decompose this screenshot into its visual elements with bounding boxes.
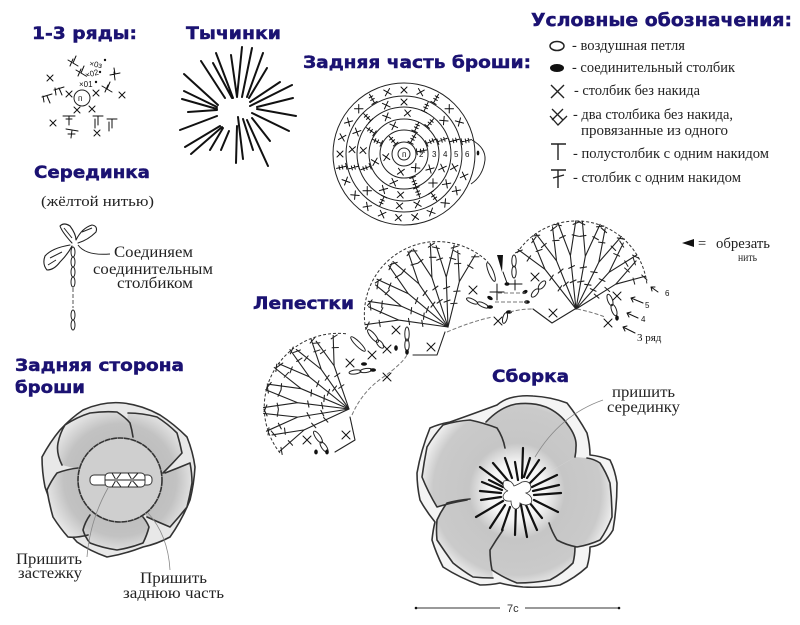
illustration: back side of brooch xyxy=(42,403,195,570)
legend item: slip stitch: - соединительный столбик xyxy=(572,60,736,76)
legend: cut thread marker xyxy=(682,236,770,264)
chart: petal 1 xyxy=(263,333,407,455)
label: join with slip stitch: столбиком xyxy=(117,275,193,292)
label: sew on back part xyxy=(123,570,224,602)
heading: stamens: Тычинки xyxy=(186,24,281,44)
chart: crochet rows 1-3: ×02 xyxy=(84,68,100,80)
label: sew on centre: серединку xyxy=(607,399,680,416)
sewn-on disc xyxy=(78,438,162,522)
heading: back side of brooch xyxy=(15,356,184,398)
legend item: two single crochets from one: провязанные из одного xyxy=(581,123,728,139)
chart: round back part of brooch: 2 xyxy=(419,150,424,159)
legend item: chain stitch: - воздушная петля xyxy=(572,38,685,54)
heading: back side of brooch: броши xyxy=(15,378,85,398)
label: join with slip stitch xyxy=(93,244,213,292)
heading: petals: Лепестки xyxy=(253,294,354,314)
label: sew on clasp xyxy=(16,551,82,582)
label: sew on clasp: застежку xyxy=(18,565,82,582)
front petals shading xyxy=(422,403,612,583)
back petal layer xyxy=(417,396,617,587)
chart: round back part of brooch: 5 xyxy=(454,150,459,159)
labels: row numbers with arrows: 4 xyxy=(641,315,646,324)
chart: petal 2 xyxy=(364,242,533,355)
label: join with slip stitch: соединительным xyxy=(93,261,213,278)
legend: cut thread marker: обрезать xyxy=(716,236,770,252)
dimension: 7 cm: 7с xyxy=(507,603,519,615)
heading: centre: Серединка xyxy=(34,163,150,183)
petal outlines xyxy=(422,403,612,583)
legend: cut thread marker: нить xyxy=(738,250,757,264)
flower centre xyxy=(503,481,532,509)
legend item: half double crochet: - полустолбик с одним накидом xyxy=(573,146,769,162)
heading: legend: Условные обозначения: xyxy=(531,10,792,31)
labels: row numbers with arrows: 6 xyxy=(665,289,670,298)
chart: crochet rows 1-3: ×0з xyxy=(89,59,103,70)
heading: assembly: Сборка xyxy=(492,367,569,387)
illustration: assembled flower xyxy=(417,396,617,587)
petal outlines xyxy=(47,412,192,550)
chart: crochet rows 1-3: ×01 xyxy=(79,80,93,89)
leader lines xyxy=(87,488,170,570)
legend item: double crochet: - столбик с одним накидом xyxy=(573,170,741,186)
legend item: two single crochets from one xyxy=(550,107,733,139)
chart: round back part of brooch: 4 xyxy=(443,150,448,159)
clasp xyxy=(90,473,152,487)
note: yellow thread: (жёлтой нитью) xyxy=(41,194,154,210)
heading: rows 1-3: 1-3 ряды: xyxy=(32,24,137,44)
label: sew on centre: пришить xyxy=(612,384,675,401)
label: sew on centre xyxy=(607,384,680,416)
legend item: single crochet: - столбик без накида xyxy=(574,83,701,99)
legend: symbols and meanings xyxy=(550,38,769,188)
back petal silhouette xyxy=(42,403,195,557)
diagram: centre chain loops xyxy=(44,224,110,330)
chart: crochet rows 1-3 xyxy=(42,56,125,138)
labels: row numbers with arrows xyxy=(623,287,670,344)
leader line xyxy=(535,400,603,457)
legend item: two single crochets from one: - два столбика без накида, xyxy=(573,107,733,123)
label: sew on back part: Пришить xyxy=(140,570,207,587)
chart: round back part of brooch: 6 xyxy=(465,150,470,159)
heading: back part of brooch: Задняя часть броши: xyxy=(303,53,531,73)
labels: row numbers with arrows: 5 xyxy=(645,301,650,310)
labels: row numbers with arrows: 3 ряд xyxy=(637,332,662,344)
label: sew on back part: заднюю часть xyxy=(123,585,224,602)
chart: round back part of brooch: п xyxy=(402,150,406,159)
heading: back side of brooch: Задняя сторона xyxy=(15,356,184,376)
chart: crochet rows 1-3: п xyxy=(78,94,82,103)
chart: round back part of brooch: 3 xyxy=(432,150,437,159)
label: sew on clasp: Пришить xyxy=(16,551,82,568)
icon: stamens burst xyxy=(180,47,296,166)
chart: round back part of brooch xyxy=(333,83,485,225)
legend: cut thread marker: = xyxy=(698,236,706,252)
front petals shading xyxy=(47,412,192,550)
stamens xyxy=(476,448,561,537)
chart: petal 3 xyxy=(495,221,648,327)
label: join with slip stitch: Соединяем xyxy=(114,244,193,261)
